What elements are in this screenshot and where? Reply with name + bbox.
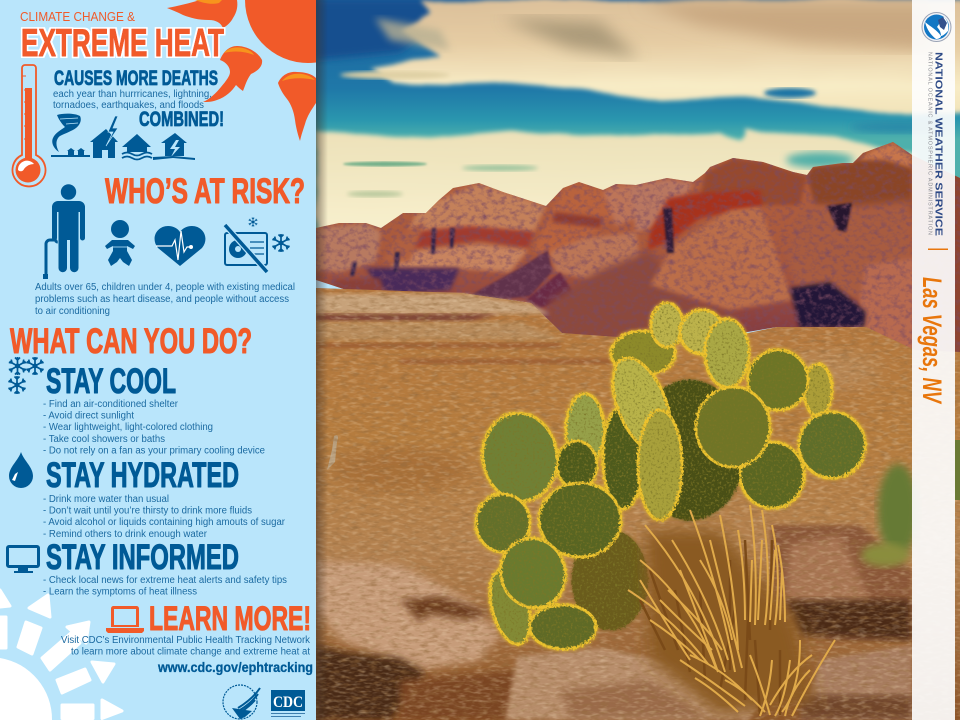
icon: water drop xyxy=(9,452,33,488)
mountain rock texture xyxy=(316,140,960,355)
heading: stay cool: STAY COOL xyxy=(46,362,176,401)
title: EXTREME HEAT xyxy=(21,22,224,65)
list: stay cool tips: - Find an air-conditioned shelter xyxy=(43,399,179,410)
icon: crossed-out air conditioner with snowflakes xyxy=(225,218,290,272)
icon: thermometer xyxy=(12,65,46,186)
text: causes detail xyxy=(53,89,212,111)
list: stay cool tips: - Take cool showers or baths xyxy=(43,434,165,445)
far left ridge xyxy=(316,223,381,272)
heading: who's at risk: WHO’S AT RISK? xyxy=(105,172,305,211)
sky xyxy=(316,0,960,240)
icon: sun with flares xyxy=(167,0,316,141)
subtitle: CLIMATE CHANGE & xyxy=(20,9,135,24)
icon: baby xyxy=(105,220,135,266)
list: stay hydrated tips: - Remind others to drink enough water xyxy=(43,529,208,540)
list: stay cool tips: - Do not rely on a fan as your primary cooling device xyxy=(43,446,265,456)
main mountain xyxy=(700,158,807,205)
photo: desert landscape with cactus xyxy=(316,0,960,720)
icon: computer monitor xyxy=(6,545,40,573)
text: who is at risk description: problems such as heart disease, and people without access xyxy=(35,294,289,305)
lower cloud bank xyxy=(316,128,915,240)
text: learn more description: Visit CDC’s Environmental Public Health Tracking Network xyxy=(61,635,311,646)
list: stay cool tips xyxy=(43,399,265,456)
second mountain xyxy=(536,182,610,256)
heading: combined: COMBINED! xyxy=(139,108,224,131)
icon: house struck by lightning xyxy=(90,116,118,158)
dark foothills xyxy=(472,250,552,300)
edge shadow next to panel xyxy=(316,0,328,720)
panel: left information column xyxy=(0,0,316,720)
text: learn more description xyxy=(61,635,311,658)
icon: snowflakes xyxy=(8,357,44,394)
dry grass xyxy=(628,505,835,716)
foreground rocks xyxy=(316,525,912,720)
icon: CDC logo xyxy=(271,690,305,717)
back mountain behind main ridge xyxy=(630,179,693,232)
ground texture xyxy=(316,285,960,720)
list: stay cool tips: - Wear lightweight, light-colored clothing xyxy=(43,422,213,433)
icon: laptop xyxy=(106,606,144,633)
text: who is at risk description: Adults over 65, children under 4, people with existing medical xyxy=(35,282,295,293)
icon: CDC logo: CDC xyxy=(273,694,303,711)
lower slope xyxy=(546,251,680,336)
heading: causes more deaths: CAUSES MORE DEATHS xyxy=(54,67,218,90)
icon: tornado xyxy=(51,114,90,157)
cactus pads xyxy=(476,303,865,649)
list: stay informed tips: - Check local news for extreme heat alerts and safety tips xyxy=(43,575,287,586)
location label: Las Vegas, NV xyxy=(917,277,947,404)
orange divider xyxy=(928,248,948,250)
heading: stay informed: STAY INFORMED xyxy=(46,538,239,577)
text: learn more description: to learn more about climate change and extreme heat at xyxy=(71,646,310,658)
icon: heart with pulse xyxy=(155,226,205,266)
agency name: NATIONAL WEATHER SERVICE xyxy=(932,52,944,236)
left mountain xyxy=(408,183,546,232)
icon: elderly person with cane xyxy=(43,184,85,279)
list: stay hydrated tips xyxy=(43,494,286,540)
list: stay hydrated tips: - Drink more water than usual xyxy=(43,494,169,505)
icon: white sun, bottom left xyxy=(0,590,122,720)
text: causes detail: each year than hurrricanes, lightning, xyxy=(53,89,212,100)
heading: learn more: LEARN MORE! xyxy=(149,600,311,638)
list: stay cool tips: - Avoid direct sunlight xyxy=(43,410,134,422)
list: stay informed tips: - Learn the symptoms of heat illness xyxy=(43,586,197,598)
icon: flooded house xyxy=(122,134,152,160)
icon: earthquake house xyxy=(153,133,195,160)
link: cdc url: www.cdc.gov/ephtracking xyxy=(157,659,313,675)
text: who is at risk description xyxy=(35,282,295,317)
NWS white banner strip xyxy=(912,0,955,720)
heading: stay hydrated: STAY HYDRATED xyxy=(46,456,239,495)
desert ground xyxy=(316,288,960,720)
list: stay informed tips xyxy=(43,575,287,598)
agency name: NATIONAL OCEANIC & ATMOSPHERIC ADMINISTRATION xyxy=(926,52,932,235)
icon: HHS logo xyxy=(223,685,260,719)
agency name xyxy=(926,52,944,236)
list: stay hydrated tips: - Avoid alcohol or liquids containing high amouts of sugar xyxy=(43,517,286,528)
text: causes detail: tornadoes, earthquakes, and floods xyxy=(53,100,204,111)
text: who is at risk description: to air conditioning xyxy=(35,306,110,317)
mountains xyxy=(316,140,960,355)
upper cloud bank xyxy=(370,0,960,114)
list: stay hydrated tips: - Don’t wait until you’re thirsty to drink more fluids xyxy=(43,506,252,516)
bush xyxy=(861,440,960,567)
heading: what can you do: WHAT CAN YOU DO? xyxy=(10,322,252,361)
icon: NOAA logo xyxy=(922,12,951,42)
